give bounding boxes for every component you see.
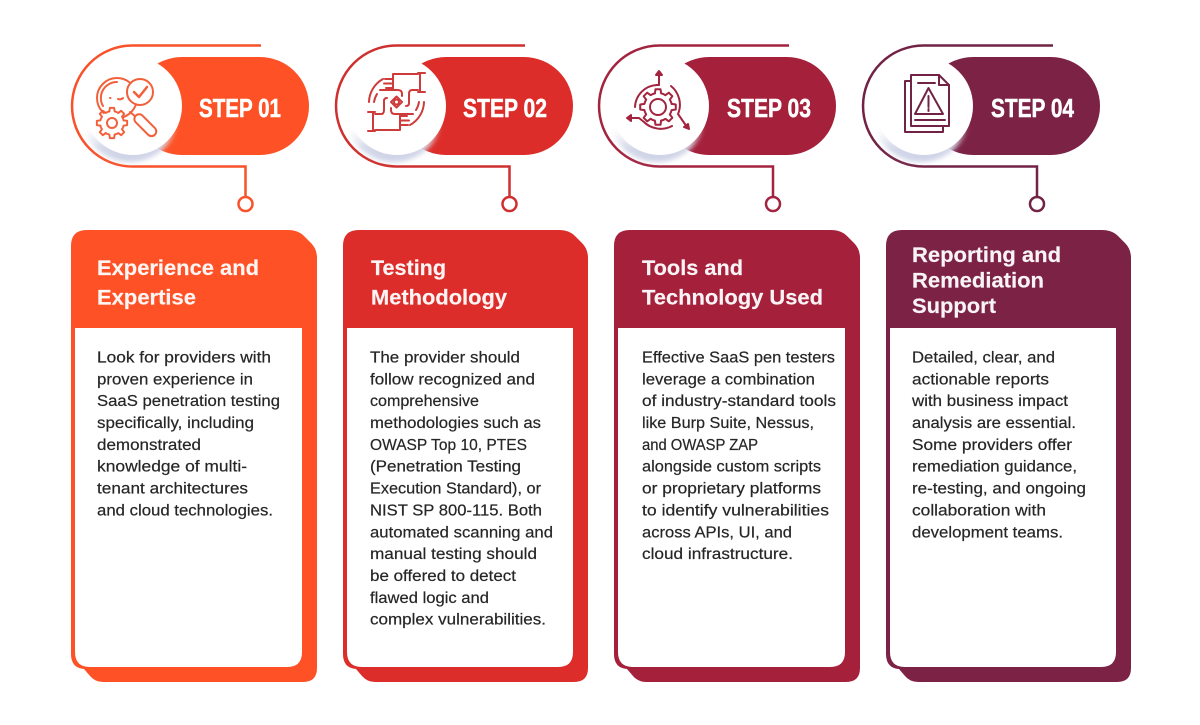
panel: tools and technology used [614, 230, 860, 682]
step 01 header [72, 46, 309, 211]
white circle [348, 57, 446, 155]
body text: The provider should [370, 350, 520, 366]
body text: Some providers offer [912, 437, 1072, 454]
icon: two hands with target [368, 73, 425, 131]
connector node [502, 197, 516, 211]
outline connector [599, 46, 789, 197]
icon: warning document [905, 75, 949, 132]
white circle [611, 57, 709, 155]
icon: magnifier with gear and check [97, 78, 158, 138]
body text: be offered to detect [370, 568, 517, 585]
pill [397, 57, 573, 155]
connector node [766, 197, 780, 211]
body text: OWASP Top 10, PTES [370, 437, 527, 454]
circle shadow [872, 64, 970, 162]
white circle [875, 57, 973, 155]
label: step 02: STEP 02 [463, 93, 547, 123]
body text: tenant architectures [97, 481, 248, 498]
body text: or proprietary platforms [642, 481, 821, 498]
outline connector [863, 46, 1053, 197]
card background [71, 230, 317, 682]
circle shadow [81, 64, 179, 162]
heading: Testing [371, 256, 446, 280]
body text: Execution Standard), or [370, 481, 541, 498]
body text: comprehensive [370, 393, 479, 410]
body text: collaboration with [912, 502, 1046, 519]
body text: and OWASP ZAP [642, 437, 758, 454]
body text: complex vulnerabilities. [370, 612, 546, 629]
body text: Effective SaaS pen testers [642, 350, 835, 366]
heading: Support [912, 294, 996, 318]
step 04 header [863, 46, 1100, 211]
body text: re-testing, and ongoing [912, 481, 1086, 498]
heading [371, 256, 507, 310]
step 03 header [599, 46, 836, 211]
connector node [1030, 197, 1044, 211]
body text: remediation guidance, [912, 459, 1077, 476]
body text: cloud infrastructure. [642, 546, 793, 563]
body text: manual testing should [370, 546, 537, 563]
body text: development teams. [912, 524, 1063, 541]
heading [97, 256, 259, 310]
heading: Reporting and [912, 243, 1061, 267]
panel: experience and expertise [71, 230, 317, 682]
panel: testing methodology [343, 230, 588, 682]
heading [912, 243, 1061, 318]
card white body [618, 328, 845, 667]
body text: across APIs, UI, and [642, 524, 792, 541]
body text: follow recognized and [370, 371, 535, 388]
card white body [347, 328, 573, 667]
pill [924, 57, 1100, 155]
body text: alongside custom scripts [642, 459, 821, 476]
heading: Technology Used [642, 286, 823, 310]
body text: and cloud technologies. [97, 502, 273, 519]
heading: Tools and [642, 256, 743, 280]
white circle [84, 57, 182, 155]
heading [642, 256, 823, 310]
circle shadow [608, 64, 706, 162]
step 02 header [336, 46, 573, 211]
card background [343, 230, 588, 682]
body text [911, 350, 1086, 541]
panel: reporting and remediation support [886, 230, 1131, 682]
body text: proven experience in [97, 371, 253, 388]
body text: SaaS penetration testing [97, 393, 280, 410]
body text: analysis are essential. [912, 415, 1076, 432]
circle shadow [345, 64, 443, 162]
body text: knowledge of multi- [97, 459, 247, 476]
label: step 04: STEP 04 [991, 93, 1074, 123]
heading: Remediation [912, 268, 1044, 292]
body text: automated scanning and [370, 524, 553, 541]
body text: specifically, including [97, 415, 254, 432]
heading: Experience and [97, 256, 259, 280]
heading: Methodology [371, 286, 507, 310]
body text: of industry-standard tools [642, 393, 836, 410]
body text: flawed logic and [370, 590, 489, 607]
outline connector [72, 46, 261, 197]
pill [660, 57, 836, 155]
icon: gear with cycle arrows [627, 71, 689, 129]
body text: with business impact [911, 393, 1069, 410]
heading: Expertise [97, 286, 196, 310]
body text: leverage a combination [642, 371, 815, 388]
body text: methodologies such as [370, 415, 541, 432]
body text: actionable reports [912, 371, 1049, 388]
body text [97, 350, 280, 519]
body text: NIST SP 800-115. Both [370, 502, 542, 519]
card white body [75, 328, 302, 667]
outline connector [336, 46, 525, 197]
body text: demonstrated [97, 437, 201, 454]
card background [886, 230, 1131, 682]
card background [614, 230, 860, 682]
card white body [890, 328, 1116, 667]
body text: like Burp Suite, Nessus, [642, 415, 814, 432]
label: step 03: STEP 03 [727, 93, 811, 123]
body text: Detailed, clear, and [912, 350, 1055, 366]
connector node [238, 197, 252, 211]
pill [133, 57, 309, 155]
body text: (Penetration Testing [370, 459, 521, 476]
label: step 01: STEP 01 [199, 93, 281, 123]
body text [642, 350, 836, 563]
body text: to identify vulnerabilities [642, 502, 829, 519]
body text: Look for providers with [97, 350, 271, 366]
body text [370, 350, 553, 629]
